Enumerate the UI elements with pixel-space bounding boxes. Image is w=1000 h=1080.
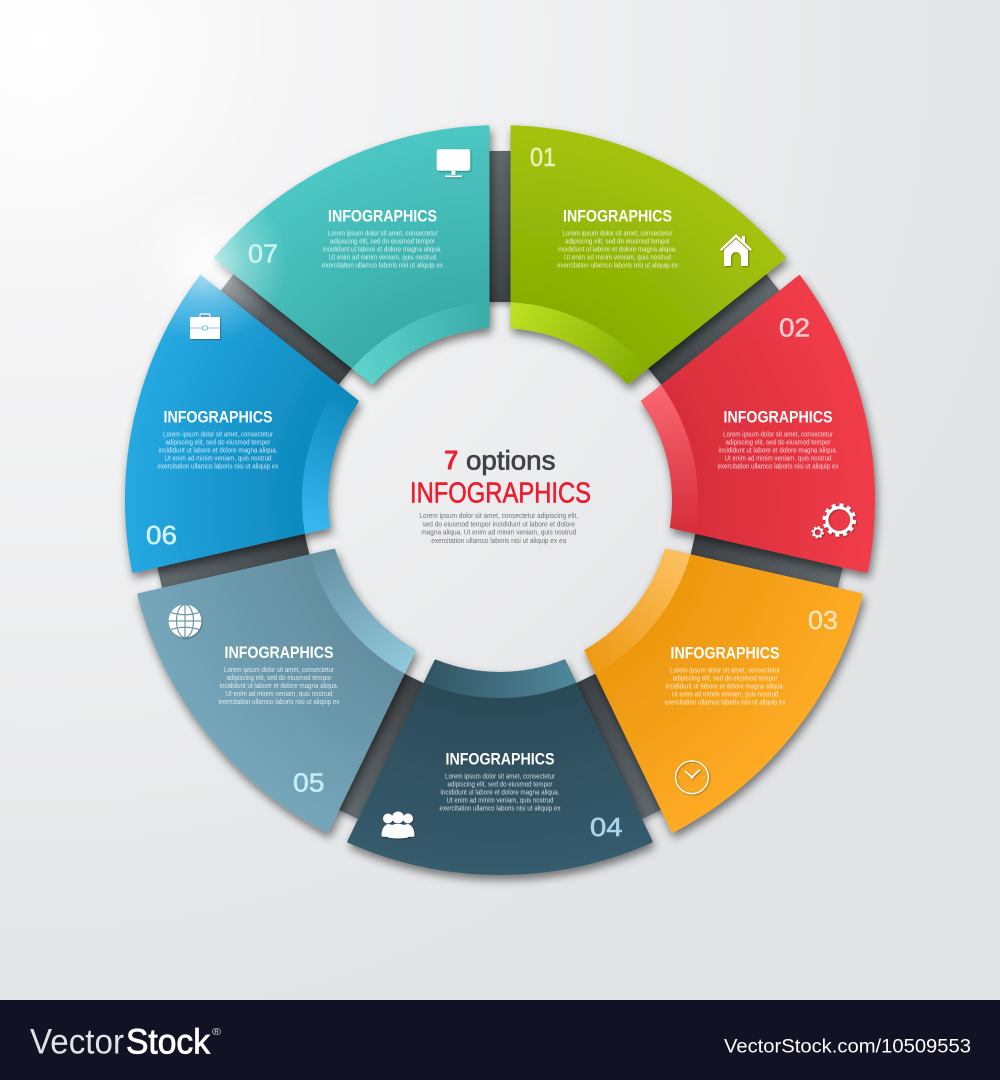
body text 02: adipiscing elit, sed do eiusmod tempor <box>726 438 831 447</box>
footer bar <box>0 1000 1000 1080</box>
segment shape 06 <box>73 248 385 573</box>
number 05: 05 <box>293 768 324 798</box>
centre body text: Lorem ipsum dolor sit amet, consectetur adipiscing elit, <box>419 511 578 520</box>
heading 03: INFOGRAPHICS <box>670 643 780 662</box>
panel: option 02 red <box>597 275 969 650</box>
body text 05: incididunt ut labore et dolore magna aliqua. <box>220 681 338 690</box>
body text 02: Lorem ipsum dolor sit amet, consectetur <box>723 430 833 439</box>
footer url: VectorStock.com/10509553 <box>724 1036 971 1058</box>
segment shape 07 <box>215 45 587 420</box>
body text 06: exercitation ullamco laboris nisi ut aliquip ex <box>158 462 279 471</box>
panel: option 06 blue <box>73 248 385 573</box>
heading 05: INFOGRAPHICS <box>224 643 334 662</box>
centre heading: 7 options: 7 <box>444 444 458 475</box>
body text 03: incididunt ut labore et dolore magna aliqua. <box>666 681 784 690</box>
icon: monitor <box>437 150 470 177</box>
body text 06: Ut enim ad minim veniam, quis nostrud <box>164 454 272 463</box>
body text 04: Lorem ipsum dolor sit amet, consectetur <box>445 771 555 780</box>
body text 05: Ut enim ad minim veniam, quis nostrud <box>226 689 332 698</box>
segment shape 02 <box>597 275 969 650</box>
segment shape 01 <box>510 127 784 385</box>
heading 02: INFOGRAPHICS <box>724 408 832 427</box>
number 04: 04 <box>590 812 622 842</box>
body text 04: incididunt ut labore et dolore magna aliqua. <box>440 787 560 796</box>
heading 07: INFOGRAPHICS <box>328 207 437 226</box>
centre body text <box>419 511 578 545</box>
segment shape 05 <box>82 480 441 832</box>
body text 04: Ut enim ad minim veniam, quis nostrud <box>446 795 554 804</box>
number 03: 03 <box>808 605 838 635</box>
icon: briefcase <box>190 314 220 339</box>
centre title block <box>410 444 591 545</box>
body text 05: exercitation ullamco laboris nisi ut aliquip ex <box>218 697 340 706</box>
body text 07: Ut enim ad minim veniam, quis nostrud <box>329 253 436 262</box>
heading 04: INFOGRAPHICS <box>446 749 554 768</box>
icon: gears <box>812 505 854 538</box>
body text 02: incididunt ut labore et dolore magna aliqua. <box>718 446 838 455</box>
panel: option 07 turquoise <box>215 45 587 420</box>
footer logo: ® <box>212 1027 222 1038</box>
light glare on upper-left segment corners <box>123 180 287 344</box>
panel: option 05 slate blue <box>82 480 441 832</box>
icon: clock <box>676 761 708 794</box>
connector strips between segments <box>157 151 843 821</box>
body text 04: adipiscing elit, sed do eiusmod tempor <box>448 779 553 788</box>
body text 07: incididunt ut labore et dolore magna aliqua. <box>323 245 442 254</box>
body text 07: adipiscing elit, sed do eiusmod tempor <box>330 237 435 246</box>
body text 06: incididunt ut labore et dolore magna aliqua. <box>158 446 278 455</box>
centre body text: exercitation ullamco laboris nisi ut aliquip ex ea <box>431 536 567 545</box>
body text 01: Lorem ipsum dolor sit amet, consectetur <box>562 228 673 238</box>
body text 02: exercitation ullamco laboris nisi ut aliquip ex <box>718 462 839 471</box>
number 07: 07 <box>248 238 278 268</box>
body text 07: Lorem ipsum dolor sit amet, consectetur <box>328 229 438 238</box>
body text 03: exercitation ullamco laboris nisi ut aliquip ex <box>664 697 786 706</box>
panel: option 01 green <box>510 127 784 385</box>
panel: option 03 orange <box>549 536 862 860</box>
centre heading word: options <box>466 445 556 475</box>
body text 07: exercitation ullamco laboris nisi ut aliquip ex <box>322 261 443 270</box>
body text 06: Lorem ipsum dolor sit amet, consectetur <box>163 430 273 439</box>
body text 04 <box>440 771 561 812</box>
body text 01: exercitation ullamco laboris nisi ut aliquip ex <box>557 260 678 270</box>
footer logo <box>30 1022 222 1061</box>
number 06: 06 <box>146 520 177 550</box>
heading 01: INFOGRAPHICS <box>563 206 672 226</box>
icon: people <box>382 812 414 838</box>
body text 02 <box>718 430 839 471</box>
body text 02: Ut enim ad minim veniam, quis nostrud <box>724 454 832 463</box>
segment shape 04 <box>294 608 653 960</box>
body text 05: adipiscing elit, sed do eiusmod tempor <box>226 673 332 682</box>
centre heading: infographics: INFOGRAPHICS <box>410 477 591 509</box>
centre body text: magna aliqua. Ut enim ad minim veniam, quis nostrud <box>421 528 576 537</box>
body text 05: Lorem ipsum dolor sit amet, consectetur <box>224 665 334 674</box>
number 02: 02 <box>779 313 810 343</box>
footer logo: Vector <box>30 1022 124 1061</box>
body text 01: incididunt ut labore et dolore magna aliqua. <box>558 244 677 254</box>
centre body text: sed do eiusmod tempor incididunt ut labore et dolore <box>422 519 575 528</box>
body text 03: Ut enim ad minim veniam, quis nostrud <box>672 689 778 698</box>
panel: option 04 dark teal <box>294 608 653 960</box>
body text 01: adipiscing elit, sed do eiusmod tempor <box>565 236 670 246</box>
body text 03 <box>664 665 786 706</box>
icon: globe <box>168 604 202 638</box>
heading 06: INFOGRAPHICS <box>164 408 272 427</box>
segment shape 03 <box>549 536 862 860</box>
icon: house <box>720 234 752 266</box>
body text 01: Ut enim ad minim veniam, quis nostrud <box>564 252 671 262</box>
body text 06: adipiscing elit, sed do eiusmod tempor <box>166 438 271 447</box>
footer logo: Stock <box>126 1022 210 1061</box>
body text 03: Lorem ipsum dolor sit amet, consectetur <box>670 665 780 674</box>
body text 07 <box>322 229 443 270</box>
body text 04: exercitation ullamco laboris nisi ut aliquip ex <box>440 803 561 812</box>
number 01: 01 <box>530 142 556 172</box>
body text 03: adipiscing elit, sed do eiusmod tempor <box>672 673 778 682</box>
body text 01 <box>557 228 678 270</box>
body text 06 <box>158 430 279 471</box>
body text 05 <box>218 665 340 706</box>
